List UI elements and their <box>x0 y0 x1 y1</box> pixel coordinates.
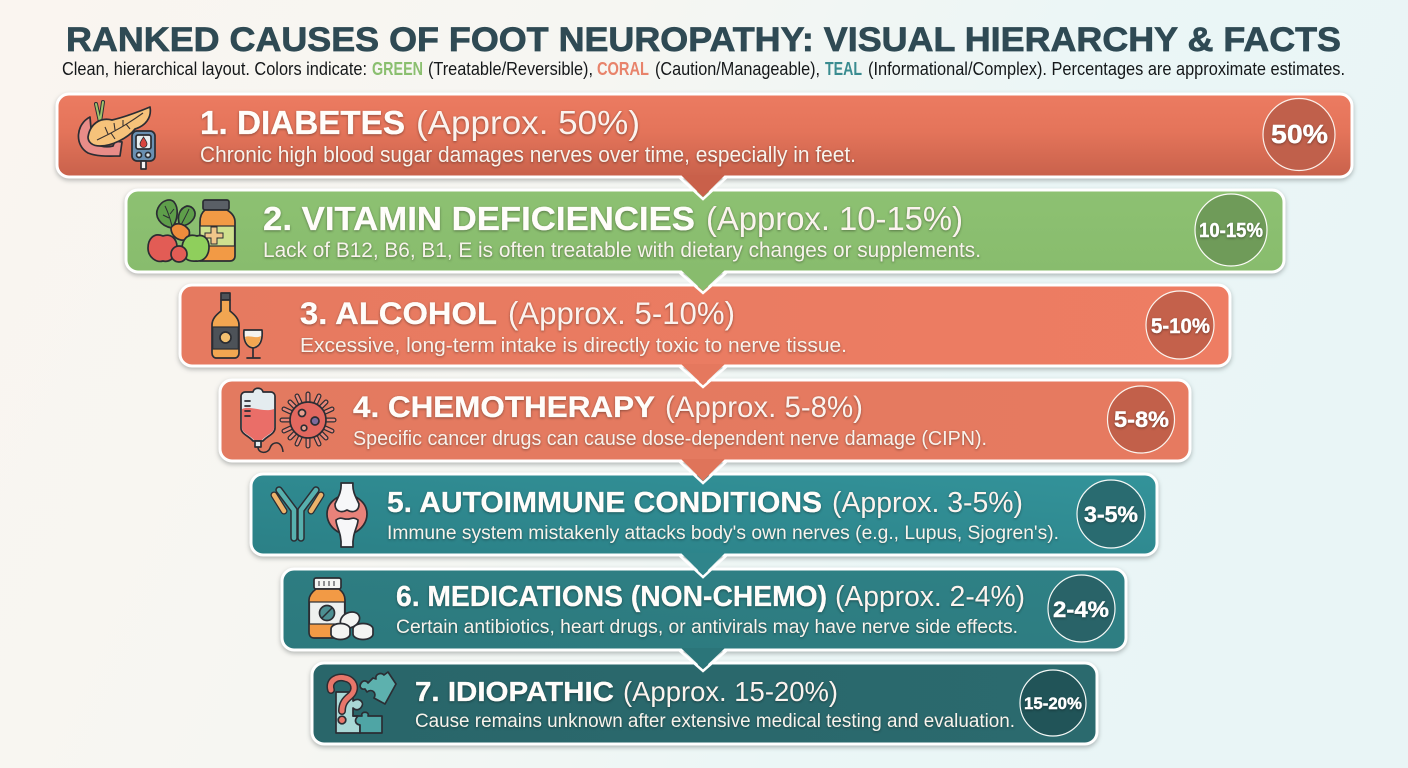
subtitle legend: CORAL <box>597 58 649 79</box>
subtitle legend: TEAL <box>825 58 862 79</box>
badge: 5-8% <box>1114 407 1169 432</box>
panel: 5 autoimmune <box>251 474 1157 577</box>
heading: (Approx. 2-4%) <box>835 581 1025 613</box>
subtitle legend: (Informational/Complex). Percentages are approximate estimates. <box>868 58 1345 79</box>
heading <box>300 295 847 357</box>
badge: 2-4% <box>1053 597 1109 622</box>
arrow <box>679 175 727 199</box>
badge <box>1077 480 1145 548</box>
badge: 50% <box>1271 119 1328 149</box>
icon: antibody and joint <box>274 483 367 547</box>
heading: Chronic high blood sugar damages nerves over time, especially in feet. <box>200 142 856 167</box>
panel: 3 alcohol <box>180 285 1230 387</box>
badge <box>1195 194 1267 266</box>
arrow <box>679 553 727 577</box>
arrow <box>679 270 727 293</box>
icon: question mark and puzzle <box>330 672 396 733</box>
heading <box>353 391 987 450</box>
heading: (Approx. 5-10%) <box>508 295 735 331</box>
heading <box>396 581 1025 638</box>
panel: 6 medications <box>282 569 1126 671</box>
icon: pill bottle <box>309 578 373 640</box>
badge <box>1048 575 1115 642</box>
badge: 10-15% <box>1199 220 1263 242</box>
heading: Immune system mistakenly attacks body's own nerves (e.g., Lupus, Sjogren's). <box>387 522 1059 544</box>
heading <box>263 200 981 262</box>
badge: 3-5% <box>1084 502 1138 527</box>
heading: (Approx. 50%) <box>416 104 640 141</box>
arrow <box>679 648 727 671</box>
heading: 2. VITAMIN DEFICIENCIES <box>263 200 695 237</box>
heading: Specific cancer drugs can cause dose-dependent nerve damage (CIPN). <box>353 428 987 450</box>
heading: 7. IDIOPATHIC <box>415 676 614 707</box>
heading: Excessive, long-term intake is directly toxic to nerve tissue. <box>300 334 847 357</box>
heading: Lack of B12, B6, B1, E is often treatable with dietary changes or supplements. <box>263 239 981 262</box>
subtitle legend: (Caution/Manageable), <box>655 58 820 79</box>
icon: pancreas and glucose meter <box>78 102 155 169</box>
heading: (Approx. 15-20%) <box>623 676 838 707</box>
badge <box>1263 98 1335 170</box>
heading: (Approx. 5-8%) <box>665 391 863 424</box>
heading: Cause remains unknown after extensive medical testing and evaluation. <box>415 711 1015 732</box>
heading: 4. CHEMOTHERAPY <box>353 391 655 424</box>
heading: 6. MEDICATIONS (NON-CHEMO) <box>396 581 827 613</box>
heading: Certain antibiotics, heart drugs, or antivirals may have nerve side effects. <box>396 616 1018 638</box>
panel: 2 vitamin deficiencies <box>126 190 1284 293</box>
subtitle legend: (Treatable/Reversible), <box>428 58 593 79</box>
heading <box>200 104 856 167</box>
heading <box>387 487 1059 544</box>
subtitle legend <box>62 58 1345 79</box>
arrow <box>679 459 727 483</box>
badge: 5-10% <box>1151 315 1210 338</box>
heading <box>415 676 1015 732</box>
heading: 1. DIABETES <box>200 104 405 141</box>
badge: 15-20% <box>1024 694 1082 713</box>
title: RANKED CAUSES OF FOOT NEUROPATHY: VISUAL HIERARCHY & FACTS <box>66 21 1341 59</box>
badge <box>1020 670 1086 736</box>
arrow <box>679 364 727 387</box>
panel: 7 idiopathic <box>312 663 1097 744</box>
badge <box>1108 386 1174 453</box>
badge <box>1146 291 1214 359</box>
heading: (Approx. 3-5%) <box>832 487 1023 519</box>
icon: bottle and glass <box>212 293 262 358</box>
heading: (Approx. 10-15%) <box>706 200 963 237</box>
heading: 3. ALCOHOL <box>300 295 497 331</box>
panel: 1 diabetes <box>57 94 1352 199</box>
subtitle legend: GREEN <box>372 58 423 79</box>
panel: 4 chemotherapy <box>220 380 1190 483</box>
icon: IV bag and virus <box>241 388 334 452</box>
heading: 5. AUTOIMMUNE CONDITIONS <box>387 487 822 519</box>
icon: fruit and supplement jar <box>148 200 235 262</box>
subtitle legend: Clean, hierarchical layout. Colors indicate: <box>62 58 367 79</box>
